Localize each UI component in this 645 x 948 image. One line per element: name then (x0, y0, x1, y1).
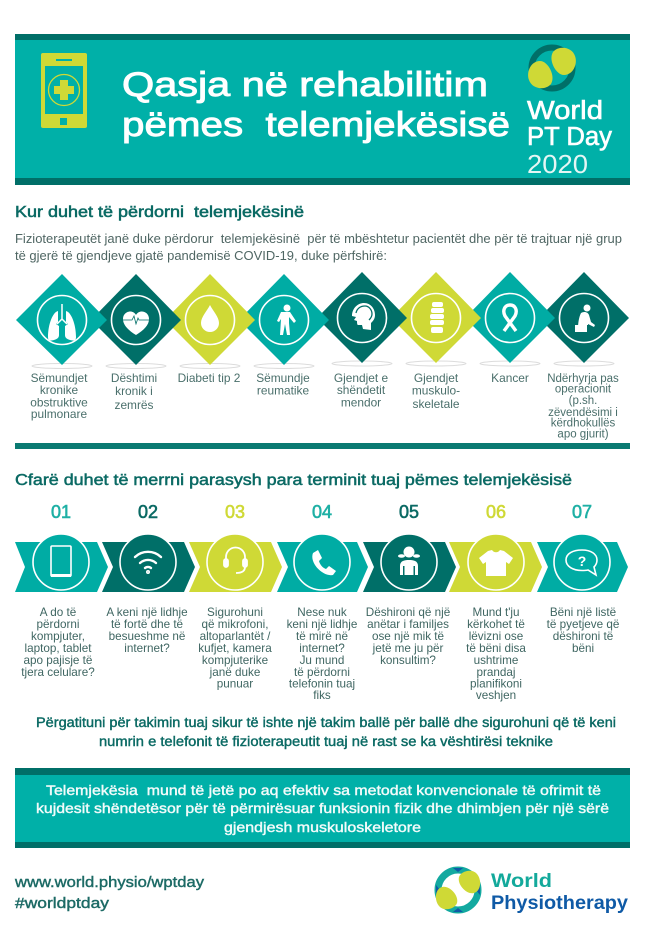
title: Qasja në rehabilitim (122, 66, 488, 104)
logo: World PT Day 2020: World (527, 97, 603, 125)
step 01: kompjuter, (31, 630, 85, 643)
step 06: prandaj (476, 666, 516, 679)
step 05: anëtar i familjes (367, 618, 449, 631)
step 06: 06 (486, 502, 506, 522)
callout: effectiveness statement: kujdesit shëndetësor për të përmirësuar funksionin fizik dhe dhimbjen për një sërë (36, 800, 609, 816)
condition: cancer: Kancer (491, 371, 529, 385)
icon: awareness ribbon (504, 305, 516, 331)
footer: web link and hashtag: #worldptday (15, 896, 110, 912)
panel: conditions diamonds (16, 272, 629, 440)
step 03 (189, 502, 282, 690)
step 05: Dëshironi që një (366, 606, 450, 619)
step 06: veshjen (476, 689, 516, 702)
panel: seven steps (15, 502, 628, 702)
step 01: 01 (51, 502, 71, 522)
icon: head with brain (352, 303, 375, 330)
condition: COPD: obstruktive (30, 396, 88, 410)
callout: effectiveness statement: Telemjekësia mund të jetë po aq efektiv sa metodat konvencionale të ofrimit të (46, 782, 601, 798)
condition: COPD (16, 274, 107, 421)
condition: heart failure: Dështimi (111, 371, 157, 385)
condition: mental health (317, 272, 407, 410)
logo: World PT Day 2020: 2020 (527, 149, 588, 179)
step 07: Bëni një listë (550, 606, 616, 619)
condition: post-surgery: (p.sh. (569, 395, 597, 407)
condition: heart failure (91, 274, 181, 412)
step 01: tjera celulare? (21, 666, 95, 679)
step 04: Nese nuk (297, 606, 347, 619)
condition: rheumatic disease: reumatike (257, 384, 309, 398)
icon: wifi (135, 552, 161, 573)
text block: introduction: Fizioterapeutët janë duke përdorur telemjekësinë për të mbështetur pacientët dhe për të trajtuar një grup (15, 232, 622, 246)
step 02 (102, 502, 195, 655)
step 05: konsultim? (380, 654, 436, 667)
step 01: përdorni (37, 618, 79, 631)
icon: tablet (51, 546, 71, 577)
step 04: internet? (299, 642, 345, 655)
step 07: bëni (572, 642, 594, 655)
step 07: 07 (572, 502, 592, 522)
footer: web link and hashtag (14, 875, 205, 912)
step 04: të mirë në (296, 630, 348, 643)
step 01: A do të (40, 606, 76, 619)
step 07: dëshironi të (553, 630, 613, 643)
text block: introduction: të gjerë të gjendjeve gjatë pandemisë COVID-19, duke përfshirë: (15, 249, 387, 263)
icon: lungs (48, 304, 76, 341)
step 04: 04 (312, 502, 332, 522)
step 04: Ju mund (300, 654, 344, 667)
panel: header banner (15, 34, 630, 185)
icon: speech bubble with question mark: ? (578, 553, 586, 569)
step 05: 05 (399, 502, 419, 522)
step 02: 02 (138, 502, 158, 522)
footer: web link and hashtag: www.world.physio/wptday (14, 875, 205, 891)
logo: World PT Day 2020: PT Day (527, 123, 612, 151)
logo: World Physiotherapy: World (491, 870, 552, 892)
title: pëmes telemjekësisë (122, 106, 510, 144)
step 06 (449, 502, 542, 702)
step 03: punuar (217, 678, 253, 690)
divider band (15, 443, 630, 449)
condition: mental health: shëndetit (337, 383, 386, 397)
heading: what to consider: Cfarë duhet të merrni parasysh para terminit tuaj pëmes telemjekësisë (15, 472, 572, 489)
icon: heart with pulse (122, 312, 149, 335)
condition: mental health: Gjendjet e (334, 371, 388, 385)
step 03: që mikrofoni, (202, 618, 268, 631)
step 03: kompjuterike (202, 654, 268, 667)
title (122, 66, 510, 144)
condition: COPD: pulmonare (31, 407, 87, 421)
step 02: internet? (124, 642, 170, 655)
step 03: altoparlantët / (200, 630, 271, 643)
condition: post-surgery: zëvendësimi i (548, 407, 618, 419)
step 01 (15, 502, 108, 679)
icon: water drop (201, 305, 219, 332)
condition: rheumatic disease (239, 274, 329, 398)
step 06: ushtrime (474, 654, 518, 667)
condition: type 2 diabetes: Diabeti tip 2 (178, 371, 241, 385)
condition: post-surgery: kërdhokullës (551, 418, 616, 430)
logo: World Physiotherapy (436, 868, 628, 914)
step 03: kufjet, kamera (198, 642, 272, 655)
step 05: jetë me ju për (372, 642, 444, 655)
step 06: lëvizni ose (469, 630, 523, 643)
condition: mental health: mendor (341, 396, 381, 410)
condition: post-surgery (539, 272, 629, 440)
condition: heart failure: zemrës (115, 398, 154, 412)
step 06: planifikoni (470, 678, 522, 690)
step 06: Mund t'ju (472, 606, 520, 619)
step 06: të bëni disa (466, 642, 526, 655)
step 02: A keni një lidhje (106, 606, 188, 619)
icon: spine (430, 302, 444, 333)
callout: effectiveness statement: gjendjesh muskuloskeletore (224, 819, 421, 835)
step 07 (537, 502, 628, 655)
logo: World Physiotherapy: Physiotherapy (491, 892, 628, 914)
text block: preparation note (36, 715, 616, 749)
condition: musculoskeletal (391, 272, 481, 411)
step 01: laptop, tablet (25, 642, 92, 655)
icon: telephone handset (312, 550, 336, 575)
condition: COPD: Sëmundjet (31, 371, 88, 385)
step 04: telefonin tuaj (289, 678, 355, 690)
text block: preparation note: Përgatituni për takimin tuaj sikur të ishte një takim ballë për ballë dhe sigurohuni që të keni (36, 715, 616, 730)
condition: post-surgery: operacionit (555, 384, 612, 396)
step 04: të përdorni (294, 666, 350, 679)
icon: phone with medical cross (41, 53, 87, 128)
condition: COPD: kronike (40, 383, 79, 397)
step 02: të fortë dhe të (111, 618, 183, 631)
condition: type 2 diabetes (165, 274, 255, 385)
step 03: Sigurohuni (207, 606, 263, 619)
condition: cancer (465, 272, 555, 385)
condition: rheumatic disease: Sëmundje (256, 371, 310, 385)
icon: family member (398, 546, 420, 575)
step 01: apo pajisje të (24, 654, 92, 667)
text block: introduction (15, 232, 622, 263)
text block: preparation note: numrin e telefonit të fizioterapeutit tuaj në rast se ka vështirësi teknike (99, 734, 553, 749)
condition: heart failure: kronik i (115, 384, 153, 398)
step 04 (277, 502, 368, 702)
icon: speech bubble with question mark (566, 550, 597, 575)
condition: musculoskeletal: Gjendjet (414, 371, 459, 385)
callout: effectiveness statement (15, 768, 630, 848)
step 04: keni një lidhje (287, 618, 357, 631)
step 03: janë duke (209, 666, 260, 679)
step 05: ose një mik të (372, 630, 444, 643)
step 05 (363, 502, 456, 667)
step 03: 03 (225, 502, 245, 522)
step 02: besueshme në (109, 630, 185, 643)
heading: when to use telehealth: Kur duhet të përdorni telemjekësinë (15, 204, 304, 221)
icon: person walking with pain (277, 304, 296, 335)
condition: post-surgery: apo gjurit) (557, 428, 609, 440)
condition: musculoskeletal: muskulo- (412, 384, 460, 398)
condition: post-surgery: Ndërhyrja pas (547, 373, 619, 385)
icon: t-shirt (479, 550, 513, 576)
step 04: fiks (313, 689, 331, 702)
step 07: të pyetjeve që (547, 618, 619, 631)
logo: World PT Day 2020 (527, 48, 612, 179)
step 06: kërkohet të (467, 618, 525, 631)
icon: headset (224, 548, 247, 573)
condition: musculoskeletal: skeletale (413, 397, 460, 411)
icon: seated person (575, 304, 595, 332)
